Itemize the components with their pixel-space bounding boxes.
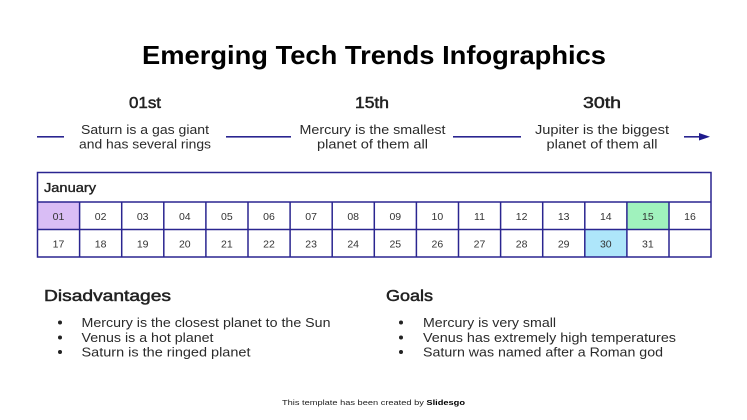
milestone: 15th: 15th bbox=[355, 95, 389, 112]
milestone: 15th: Mercury is the smallest bbox=[300, 122, 446, 137]
calendar row 1: 01 bbox=[53, 211, 64, 223]
timeline segment 2 bbox=[226, 136, 291, 138]
calendar row 2: 22 bbox=[263, 238, 275, 250]
calendar row 1: 15 bbox=[642, 211, 654, 223]
calendar row 2 bbox=[53, 238, 654, 250]
bullet list: disadvantages: Mercury is the closest planet to the Sun bbox=[82, 315, 330, 330]
calendar row 1: 02 bbox=[95, 211, 107, 223]
bullet list: disadvantages: Saturn is the ringed planet bbox=[82, 344, 251, 360]
calendar row 2: 27 bbox=[474, 238, 485, 250]
calendar row 1: 12 bbox=[516, 211, 528, 223]
timeline bbox=[37, 95, 710, 152]
highlighted day 30 bbox=[585, 230, 627, 257]
calendar row 1: 16 bbox=[684, 211, 696, 223]
calendar row 2: 29 bbox=[558, 238, 570, 250]
bullet list: disadvantages bbox=[58, 315, 330, 360]
milestone: 01st: Saturn is a gas giant bbox=[81, 122, 209, 137]
bullet list: goals: Venus has extremely high temperatures bbox=[423, 330, 677, 345]
calendar row 1: 09 bbox=[389, 211, 401, 223]
heading: goals: Goals bbox=[386, 288, 433, 305]
calendar row 2: 31 bbox=[642, 238, 654, 250]
calendar row 2: 18 bbox=[95, 238, 107, 250]
milestone: 30th: planet of them all bbox=[546, 136, 658, 152]
calendar row 1: 10 bbox=[432, 211, 443, 223]
panel: disadvantages bbox=[44, 288, 330, 360]
highlighted day 01 bbox=[38, 202, 80, 230]
calendar row 2: 23 bbox=[305, 238, 317, 250]
title: Emerging Tech Trends Infographics bbox=[142, 40, 606, 70]
month label: January bbox=[44, 180, 97, 195]
bullet list: goals: Saturn was named after a Roman god bbox=[423, 344, 663, 360]
calendar row 1: 05 bbox=[221, 211, 233, 223]
milestone: 01st: 01st bbox=[129, 95, 162, 112]
arrow bbox=[684, 133, 710, 140]
calendar bbox=[38, 172, 711, 257]
calendar row 2: 26 bbox=[432, 238, 443, 250]
highlighted day 15 bbox=[627, 202, 669, 230]
calendar row 1: 14 bbox=[600, 211, 612, 223]
calendar row 1: 08 bbox=[347, 211, 359, 223]
bullet list: goals bbox=[399, 315, 677, 360]
calendar row 1: 13 bbox=[558, 211, 570, 223]
calendar row 1: 04 bbox=[179, 211, 191, 223]
calendar row 1: 11 bbox=[474, 211, 485, 223]
calendar row 2: 21 bbox=[221, 238, 233, 250]
calendar row 2: 25 bbox=[389, 238, 401, 250]
heading: disadvantages: Disadvantages bbox=[44, 288, 171, 305]
panel: goals bbox=[386, 288, 677, 360]
timeline segment 1 bbox=[37, 136, 64, 138]
calendar row 1: 06 bbox=[263, 211, 275, 223]
milestone: 01st bbox=[79, 95, 212, 152]
calendar row 2: 30 bbox=[600, 238, 612, 250]
milestone: 30th: Jupiter is the biggest bbox=[535, 122, 669, 137]
calendar row 2: 24 bbox=[347, 238, 359, 250]
milestone: 01st: and has several rings bbox=[79, 136, 212, 152]
bullet list: goals: Mercury is very small bbox=[423, 315, 556, 330]
calendar row 2: 19 bbox=[137, 238, 149, 250]
bullet list: disadvantages: Venus is a hot planet bbox=[82, 330, 214, 345]
calendar row 1: 03 bbox=[137, 211, 149, 223]
milestone: 30th bbox=[535, 95, 669, 152]
calendar row 2: 17 bbox=[53, 238, 64, 250]
calendar row 2: 28 bbox=[516, 238, 528, 250]
timeline segment 3 bbox=[453, 136, 521, 138]
calendar row 1: 07 bbox=[305, 211, 317, 223]
milestone: 30th: 30th bbox=[583, 95, 621, 112]
footer credit: This template has been created by Slidesgo bbox=[282, 398, 466, 407]
calendar row 2: 20 bbox=[179, 238, 191, 250]
milestone: 15th bbox=[300, 95, 446, 152]
milestone: 15th: planet of them all bbox=[317, 136, 428, 152]
calendar row 1 bbox=[53, 211, 696, 223]
